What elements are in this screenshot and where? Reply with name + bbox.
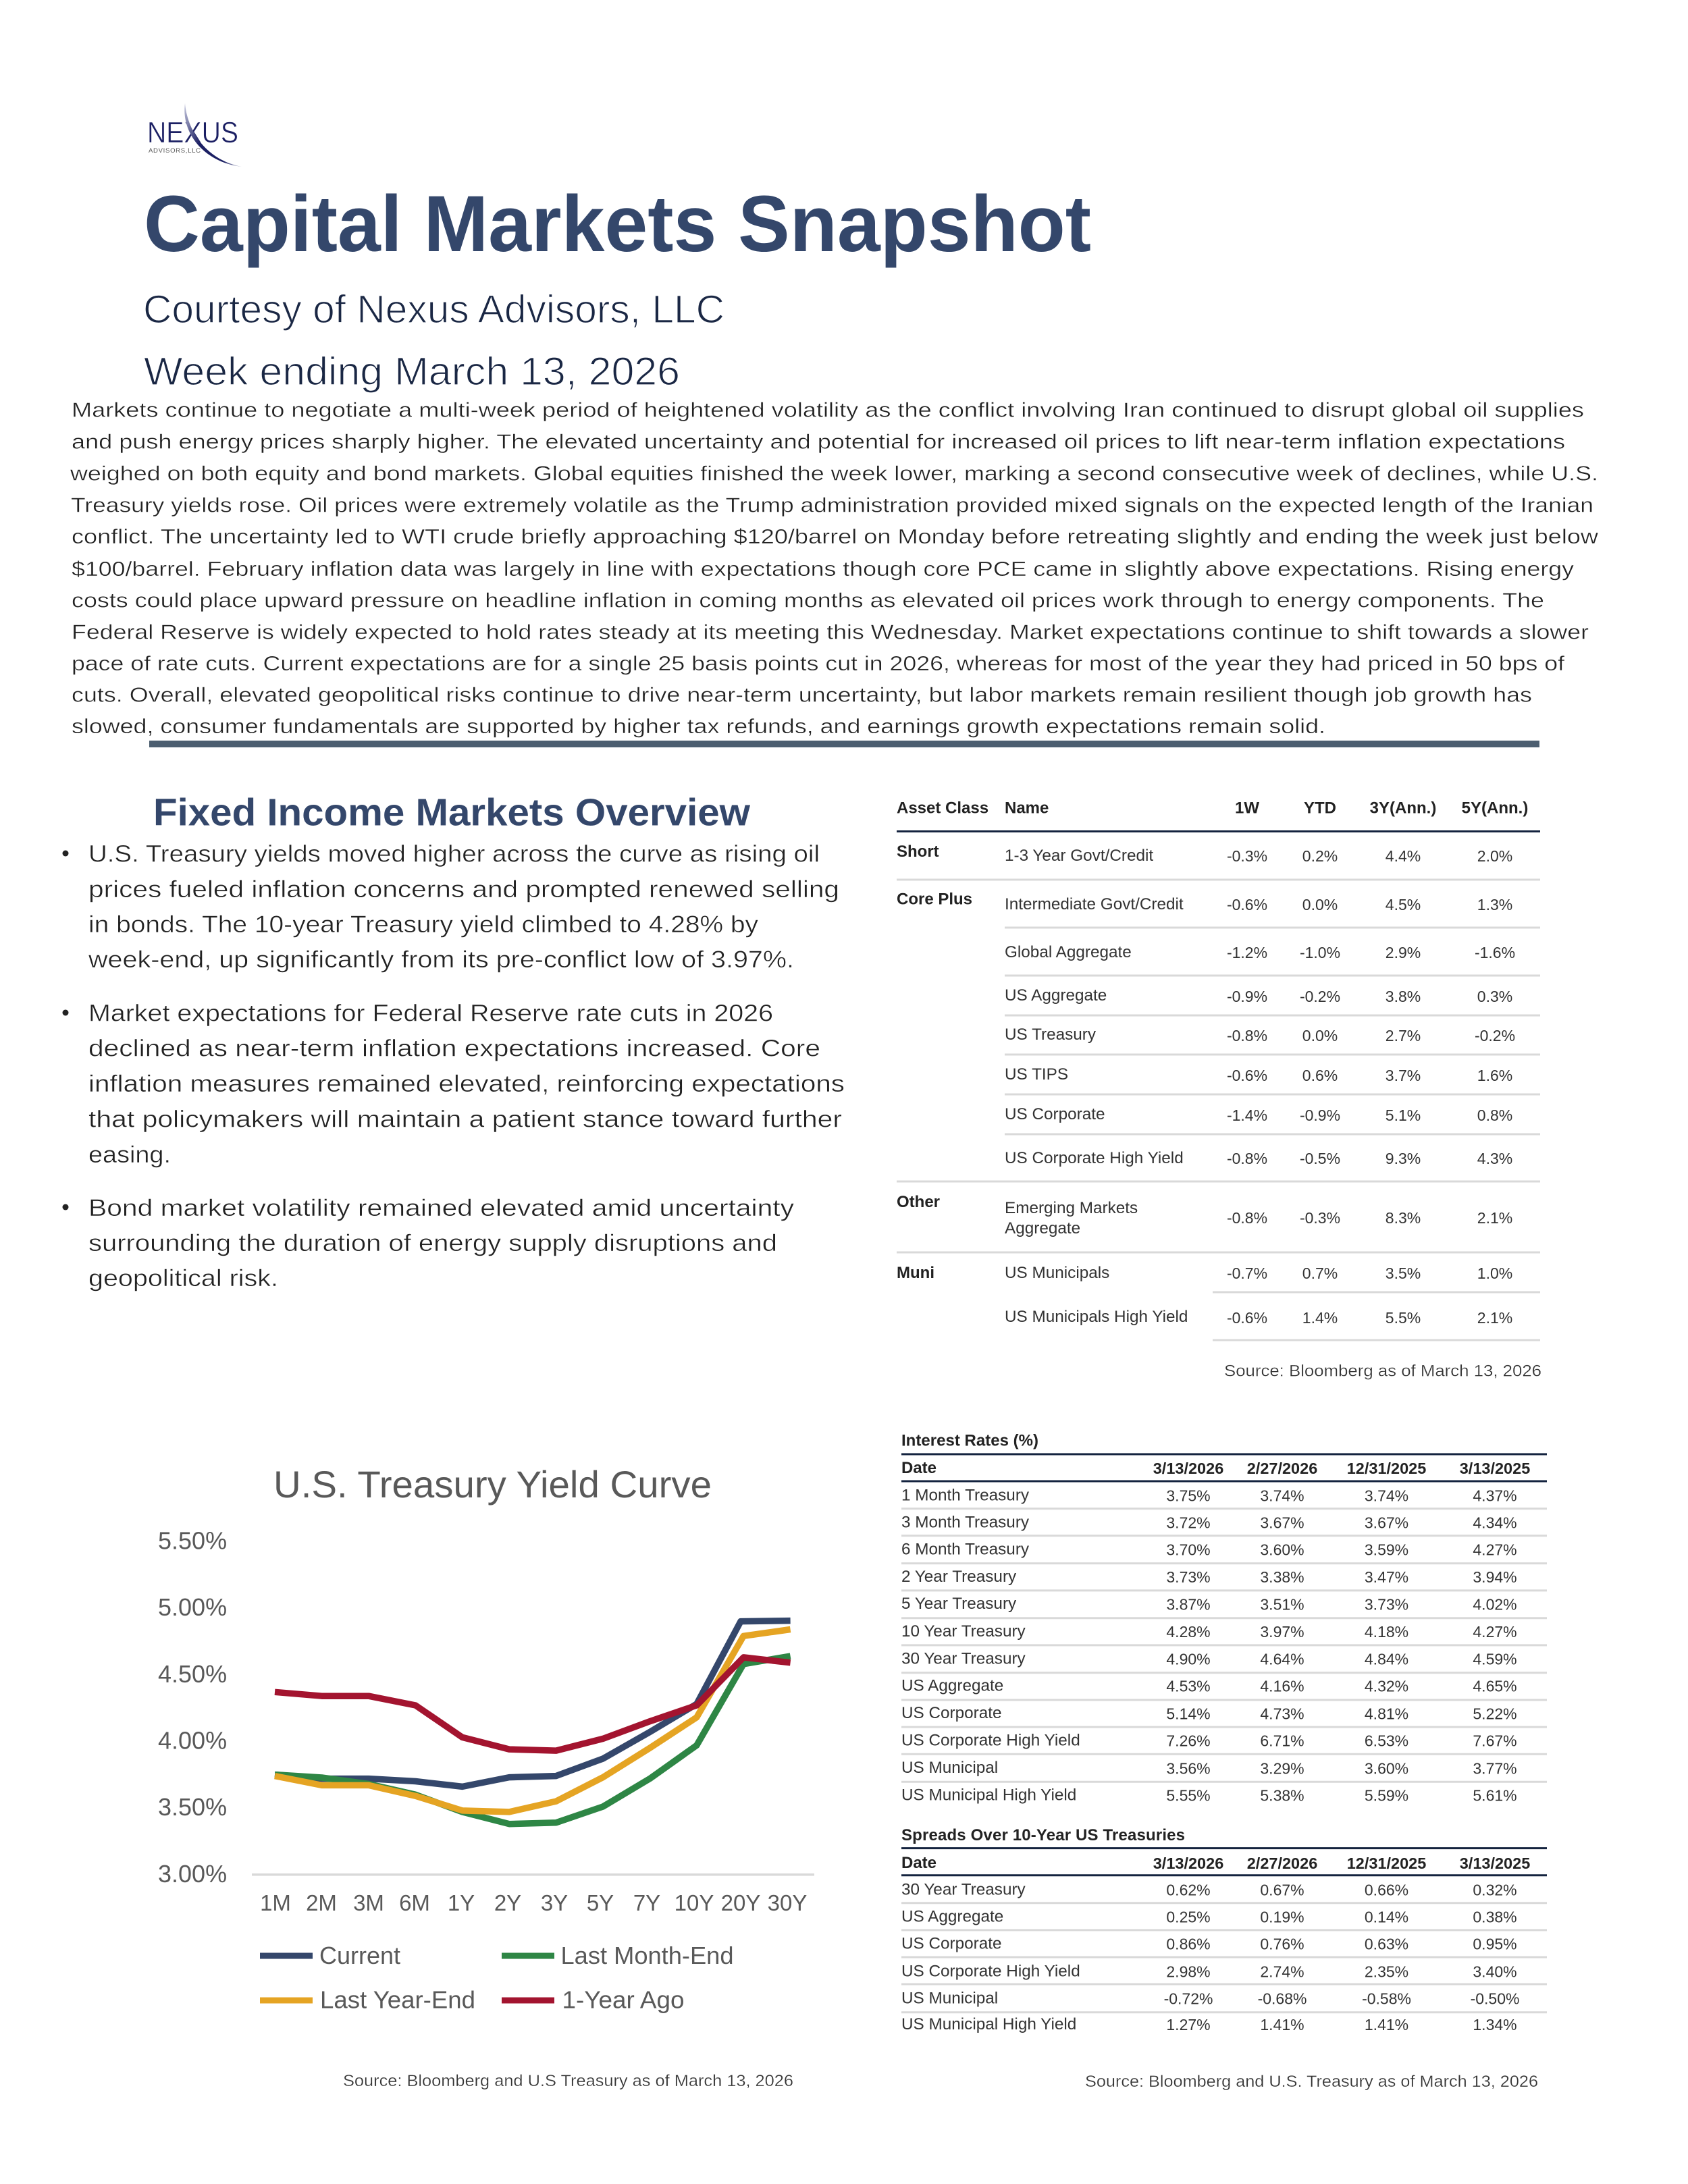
table rows: -0.3% — [1300, 1209, 1340, 1227]
table rows: 0.95% — [1473, 1935, 1517, 1952]
table rows: 1-3 Year Govt/Credit — [1005, 847, 1153, 865]
market summary paragraph: Federal Reserve is widely expected to hold rates steady at its meeting this Wednesday. Market expectations continue to shift towards a slower — [72, 620, 1589, 644]
table header: 3/13/2025 — [1460, 1855, 1530, 1872]
line: last year-end — [275, 1630, 791, 1812]
table rows: -0.2% — [1300, 988, 1340, 1005]
table rows: 4.18% — [1365, 1623, 1408, 1641]
table rows: 3.5% — [1386, 1264, 1421, 1282]
panel: fixed income overview — [62, 791, 845, 1291]
x axis labels: 7Y — [633, 1890, 660, 1915]
market summary paragraph: weighed on both equity and bond markets. Global equities finished the week lower, marking a second consecutive week of declines, while U.S. — [70, 462, 1598, 485]
table rows: -0.3% — [1227, 847, 1267, 865]
bullet list: Market expectations for Federal Reserve rate cuts in 2026 — [88, 1001, 773, 1026]
table rows: US Corporate High Yield — [1005, 1149, 1184, 1167]
table rows: US Corporate High Yield — [901, 1962, 1080, 1981]
x axis labels — [260, 1890, 807, 1915]
table rows: 4.27% — [1473, 1623, 1517, 1641]
x axis labels: 6M — [399, 1890, 430, 1915]
line: 1-year ago — [275, 1657, 791, 1751]
table rows: 7.67% — [1473, 1732, 1517, 1750]
table rows: 7.26% — [1166, 1732, 1211, 1750]
table rows: 3.67% — [1365, 1514, 1408, 1531]
table rows: 1.6% — [1477, 1067, 1512, 1084]
bullet list: easing. — [88, 1142, 171, 1168]
table rows: 5.22% — [1473, 1705, 1517, 1723]
bullet list — [62, 841, 845, 1291]
x axis labels: 3M — [353, 1890, 384, 1915]
logo: Nexus Advisors — [147, 103, 242, 167]
market summary paragraph: pace of rate cuts. Current expectations are for a single 25 basis points cut in 2026, whereas for most of the year they had priced in 50 bps of — [72, 651, 1564, 675]
table rows: 4.02% — [1473, 1596, 1517, 1614]
bullet list: declined as near-term inflation expectations increased. Core — [88, 1036, 820, 1061]
table rows: Intermediate Govt/Credit — [1005, 895, 1184, 913]
subtitle: week ending date: Week ending March 13, 2026 — [144, 350, 680, 394]
x axis labels: 10Y — [675, 1890, 714, 1915]
table rows: 3.47% — [1365, 1568, 1408, 1586]
table rows: 4.90% — [1166, 1650, 1211, 1668]
market summary paragraph: conflict. The uncertainty led to WTI crude briefly approaching $120/barrel on Monday before retreating slightly and ending the week just below — [72, 525, 1599, 548]
table rows: 0.19% — [1260, 1908, 1304, 1925]
table rows: US Corporate High Yield — [901, 1731, 1080, 1750]
table rows — [1005, 847, 1515, 1327]
table rows: 0.38% — [1473, 1908, 1517, 1925]
table rows: 5.14% — [1166, 1705, 1211, 1723]
table rows: 3.59% — [1365, 1541, 1408, 1558]
table rows: US TIPS — [1005, 1065, 1068, 1084]
table rows: 4.84% — [1365, 1650, 1408, 1668]
table rows: 3.60% — [1365, 1759, 1408, 1777]
market summary paragraph: Markets continue to negotiate a multi-week period of heightened volatility as the conflict involving Iran continued to disrupt global oil supplies — [72, 398, 1584, 421]
table rows: US Municipal High Yield — [901, 1786, 1076, 1804]
asset class labels: Short — [897, 843, 939, 861]
table rows: 0.7% — [1302, 1264, 1338, 1282]
table rows: US Treasury — [1005, 1026, 1097, 1044]
source note: Source: Bloomberg and U.S. Treasury as of March 13, 2026 — [1085, 2073, 1538, 2091]
table rows: 0.76% — [1260, 1935, 1304, 1952]
table rows: 4.16% — [1260, 1677, 1304, 1695]
table rows: -0.9% — [1227, 988, 1267, 1005]
table rows: US Corporate — [901, 1704, 1002, 1722]
table header: 3Y(Ann.) — [1370, 799, 1436, 817]
legend — [260, 1942, 733, 2013]
market summary paragraph: cuts. Overall, elevated geopolitical risks continue to drive near-term uncertainty, but labor markets remain resilient though job growth has — [72, 683, 1532, 706]
heading: Fixed Income Markets Overview — [153, 791, 751, 834]
market summary paragraph: Treasury yields rose. Oil prices were extremely volatile as the Trump administration provided mixed signals on the expected length of the Iranian — [71, 493, 1593, 517]
table rows: 2.9% — [1386, 944, 1421, 961]
table rows: -1.4% — [1227, 1107, 1267, 1124]
table rows: -0.8% — [1227, 1027, 1267, 1044]
table rows: 0.25% — [1166, 1908, 1211, 1925]
table rows: 3.75% — [1166, 1487, 1211, 1504]
table rows: 0.62% — [1166, 1881, 1211, 1898]
legend: Last Year-End — [320, 1986, 475, 2013]
y axis labels — [158, 1527, 227, 1888]
table rows: 4.28% — [1166, 1623, 1211, 1641]
table rows: 3.8% — [1386, 988, 1421, 1005]
table header — [901, 1459, 1530, 1477]
table rows: 3.74% — [1260, 1487, 1304, 1504]
table rows: 2.74% — [1260, 1963, 1304, 1981]
table rows: 4.64% — [1260, 1650, 1304, 1668]
table rows: 1.41% — [1260, 2016, 1304, 2033]
y axis labels: 4.50% — [158, 1660, 227, 1688]
table rows: 1.3% — [1477, 896, 1512, 913]
table rows: 1 Month Treasury — [901, 1487, 1030, 1504]
table rows: 4.34% — [1473, 1514, 1517, 1531]
table rows: US Aggregate — [901, 1677, 1003, 1695]
table header — [897, 799, 1528, 817]
table rows: 5.5% — [1386, 1309, 1421, 1327]
table rows: 3.7% — [1386, 1067, 1421, 1084]
table rows: 3.40% — [1473, 1963, 1517, 1981]
market summary paragraph — [70, 398, 1599, 738]
table rows: -0.6% — [1227, 1067, 1267, 1084]
table header: Name — [1005, 799, 1049, 817]
table rows: -0.2% — [1475, 1027, 1515, 1044]
table header — [901, 1854, 1530, 1872]
x axis labels: 30Y — [768, 1890, 807, 1915]
table rows: 6.71% — [1260, 1732, 1304, 1750]
table rows: 4.37% — [1473, 1487, 1517, 1504]
asset class labels — [897, 843, 972, 1282]
table header: 3/13/2026 — [1153, 1460, 1223, 1477]
table rows: 0.0% — [1302, 896, 1338, 913]
table rows: 1.4% — [1302, 1309, 1338, 1327]
table rows: 3.74% — [1365, 1487, 1408, 1504]
table rows: 5.38% — [1260, 1786, 1304, 1804]
table header: 1W — [1235, 799, 1259, 817]
bullet list: that policymakers will maintain a patient stance toward further — [88, 1106, 842, 1133]
table rows: 4.65% — [1473, 1677, 1517, 1695]
source note: Source: Bloomberg as of March 13, 2026 — [1224, 1362, 1541, 1380]
asset class labels: Muni — [897, 1264, 934, 1282]
market summary paragraph: slowed, consumer fundamentals are supported by higher tax refunds, and earnings growth expectations remain solid. — [72, 714, 1325, 738]
table rows: -0.58% — [1362, 1990, 1411, 2008]
table rows: 4.73% — [1260, 1705, 1304, 1723]
table rows: 0.86% — [1166, 1935, 1211, 1952]
table rows: -0.68% — [1258, 1990, 1307, 2008]
table rows: -0.72% — [1164, 1990, 1213, 2008]
table rows: 0.63% — [1365, 1935, 1408, 1952]
table rows: -0.5% — [1300, 1150, 1340, 1167]
table rows: 8.3% — [1386, 1209, 1421, 1227]
table rows: 3.29% — [1260, 1759, 1304, 1777]
market summary paragraph: costs could place upward pressure on headline inflation in coming months as elevated oil prices work through to energy components. The — [72, 589, 1544, 612]
x axis labels: 5Y — [587, 1890, 614, 1915]
table rows: -0.8% — [1227, 1150, 1267, 1167]
table rows: 3.73% — [1166, 1568, 1211, 1586]
table rows: -0.9% — [1300, 1107, 1340, 1124]
table rows: -0.50% — [1471, 1990, 1519, 2008]
legend: 1-Year Ago — [562, 1986, 685, 2013]
x axis labels: 3Y — [541, 1890, 568, 1915]
table rows: 5.1% — [1386, 1107, 1421, 1124]
table rows: 4.27% — [1473, 1541, 1517, 1558]
table rows: 9.3% — [1386, 1150, 1421, 1167]
table rows: 6 Month Treasury — [901, 1541, 1030, 1558]
table rows: US Corporate — [1005, 1105, 1105, 1123]
y axis labels: 5.50% — [158, 1527, 227, 1554]
market summary paragraph: and push energy prices sharply higher. The elevated uncertainty and potential for increased oil prices to lift near-term inflation expectations — [72, 429, 1565, 454]
bullet list: inflation measures remained elevated, reinforcing expectations — [88, 1071, 845, 1097]
table rows: US Municipal High Yield — [901, 2015, 1076, 2033]
chart title: U.S. Treasury Yield Curve — [273, 1463, 712, 1506]
y axis labels: 3.00% — [158, 1860, 227, 1888]
table rows: Global Aggregate — [1005, 943, 1132, 961]
table rows: 3.72% — [1166, 1514, 1211, 1531]
table header: 2/27/2026 — [1247, 1855, 1317, 1872]
table rows: 4.32% — [1365, 1677, 1408, 1695]
table rows: 4.4% — [1386, 847, 1421, 865]
y axis labels: 4.00% — [158, 1727, 227, 1754]
table rows: 0.32% — [1473, 1881, 1517, 1898]
table rows: 30 Year Treasury — [901, 1650, 1026, 1668]
table rows: US Municipal — [901, 1759, 998, 1777]
table rows: US Aggregate — [901, 1908, 1003, 1925]
table header: YTD — [1304, 799, 1336, 817]
bullet list: U.S. Treasury yields moved higher across the curve as rising oil — [88, 841, 820, 867]
table title: Spreads Over 10-Year US Treasuries — [901, 1826, 1185, 1844]
asset class labels: Core Plus — [897, 890, 972, 909]
table: fixed income returns — [897, 799, 1541, 1380]
table rows: 1.0% — [1477, 1264, 1512, 1282]
table header: 5Y(Ann.) — [1462, 799, 1528, 817]
title: Capital Markets Snapshot — [144, 180, 1091, 269]
bullet list: surrounding the duration of energy supply disruptions and — [88, 1230, 777, 1256]
bullet list: Bond market volatility remained elevated amid uncertainty — [88, 1195, 795, 1221]
table rows: 0.67% — [1260, 1881, 1304, 1898]
table rows: 0.6% — [1302, 1067, 1338, 1084]
bullet list: prices fueled inflation concerns and prompted renewed selling — [88, 876, 839, 903]
table rows: -1.2% — [1227, 944, 1267, 961]
x axis labels: 1M — [260, 1890, 291, 1915]
table rows: 10 Year Treasury — [901, 1622, 1026, 1641]
table rows: 5 Year Treasury — [901, 1595, 1017, 1613]
table rows — [901, 1881, 1519, 2033]
legend: Current — [319, 1942, 400, 1969]
table rows: 3.87% — [1166, 1596, 1211, 1614]
table rows: US Municipal — [901, 1989, 998, 2008]
table rows: 3.94% — [1473, 1568, 1517, 1586]
table rows: 4.3% — [1477, 1150, 1512, 1167]
table rows: 0.66% — [1365, 1881, 1408, 1898]
table rows: 2.98% — [1166, 1963, 1211, 1981]
table rows: Aggregate — [1005, 1219, 1080, 1237]
table rows: 2.1% — [1477, 1309, 1512, 1327]
table rows: -0.8% — [1227, 1209, 1267, 1227]
table rows: 5.61% — [1473, 1786, 1517, 1804]
y axis labels: 3.50% — [158, 1793, 227, 1821]
table rows: 2 Year Treasury — [901, 1568, 1017, 1586]
bullet list: geopolitical risk. — [88, 1265, 278, 1291]
table header: Date — [901, 1854, 937, 1872]
table rows: 3.97% — [1260, 1623, 1304, 1641]
table rows: 1.41% — [1365, 2016, 1408, 2033]
table rows: US Municipals — [1005, 1264, 1109, 1282]
logo: Nexus Advisors: ADVISORS,LLC — [149, 147, 201, 155]
table rows: 4.5% — [1386, 896, 1421, 913]
table rows: 3.38% — [1260, 1568, 1304, 1586]
table rows: 2.0% — [1477, 847, 1512, 865]
table rows: 2.7% — [1386, 1027, 1421, 1044]
bullet list: week-end, up significantly from its pre-conflict low of 3.97%. — [88, 947, 794, 973]
table rows: 30 Year Treasury — [901, 1881, 1026, 1898]
table rows: 3.56% — [1166, 1759, 1211, 1777]
logo: Nexus Advisors: NEXUS — [147, 116, 238, 149]
table rows: 1.27% — [1166, 2016, 1211, 2033]
section divider bar — [149, 741, 1539, 747]
table rows: 0.0% — [1302, 1027, 1338, 1044]
table rows: US Aggregate — [1005, 986, 1107, 1005]
x axis labels: 20Y — [721, 1890, 760, 1915]
market summary paragraph: $100/barrel. February inflation data was largely in line with expectations though core PCE came in slightly above expectations. Rising energy — [72, 557, 1575, 581]
table header: 2/27/2026 — [1247, 1460, 1317, 1477]
legend: Last Month-End — [560, 1942, 733, 1969]
table rows: -1.6% — [1475, 944, 1515, 961]
table: spreads over 10-year treasuries — [901, 1826, 1547, 2091]
chart: U.S. Treasury yield curve — [158, 1463, 814, 2090]
line: current — [275, 1621, 791, 1786]
x axis labels: 1Y — [448, 1890, 475, 1915]
table rows: US Corporate — [901, 1935, 1002, 1952]
source note: Source: Bloomberg and U.S Treasury as of March 13, 2026 — [343, 2072, 793, 2090]
y axis labels: 5.00% — [158, 1593, 227, 1621]
table rows — [901, 1487, 1517, 1804]
table rows: 3.67% — [1260, 1514, 1304, 1531]
subtitle: courtesy line: Courtesy of Nexus Advisors, LLC — [143, 288, 724, 331]
bullet list: in bonds. The 10-year Treasury yield climbed to 4.28% by — [88, 911, 759, 938]
table rows: -0.6% — [1227, 896, 1267, 913]
table rows: 1.34% — [1473, 2016, 1517, 2033]
table rows: Emerging Markets — [1005, 1199, 1138, 1217]
table rows: 3.60% — [1260, 1541, 1304, 1558]
table header: 12/31/2025 — [1347, 1855, 1426, 1872]
table header: 3/13/2025 — [1460, 1460, 1530, 1477]
table rows: 6.53% — [1365, 1732, 1408, 1750]
table rows: 3.77% — [1473, 1759, 1517, 1777]
table rows: -0.6% — [1227, 1309, 1267, 1327]
table rows: 0.8% — [1477, 1107, 1512, 1124]
table rows: 4.53% — [1166, 1677, 1211, 1695]
table rows: 2.1% — [1477, 1209, 1512, 1227]
table rows: 3 Month Treasury — [901, 1514, 1030, 1531]
table rows: -0.7% — [1227, 1264, 1267, 1282]
x axis labels: 2Y — [494, 1890, 521, 1915]
x axis labels: 2M — [306, 1890, 337, 1915]
table: interest rates — [901, 1431, 1547, 1804]
line: last month-end — [275, 1656, 791, 1824]
table header: Date — [901, 1459, 937, 1477]
table header: 12/31/2025 — [1347, 1460, 1426, 1477]
table header: 3/13/2026 — [1153, 1855, 1223, 1872]
table rows: 3.51% — [1260, 1596, 1304, 1614]
table rows: 3.73% — [1365, 1596, 1408, 1614]
table rows: 3.70% — [1166, 1541, 1211, 1558]
table rows: 5.59% — [1365, 1786, 1408, 1804]
table rows: 2.35% — [1365, 1963, 1408, 1981]
table rows: -1.0% — [1300, 944, 1340, 961]
table title: Interest Rates (%) — [901, 1431, 1038, 1450]
table rows: 0.3% — [1477, 988, 1512, 1005]
table rows: US Municipals High Yield — [1005, 1308, 1188, 1326]
table header: Asset Class — [897, 799, 988, 817]
table rows: 5.55% — [1166, 1786, 1211, 1804]
table rows: 0.2% — [1302, 847, 1338, 865]
table rows: 4.81% — [1365, 1705, 1408, 1723]
table rows: 4.59% — [1473, 1650, 1517, 1668]
asset class labels: Other — [897, 1193, 940, 1211]
table rows: 0.14% — [1365, 1908, 1408, 1925]
